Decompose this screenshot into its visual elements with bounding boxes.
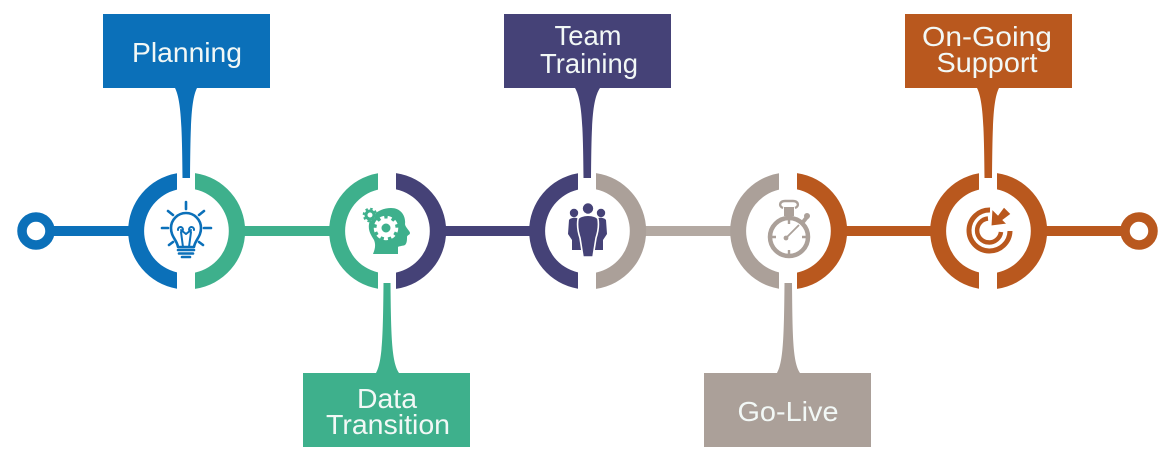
step: data transition bbox=[303, 173, 470, 447]
ring: team training bbox=[529, 173, 646, 289]
ring: data transition bbox=[329, 173, 446, 289]
callout: data transition: Transition bbox=[326, 409, 450, 440]
callout: data transition: Data bbox=[357, 383, 417, 414]
callout: on-going support: On-Going bbox=[922, 21, 1052, 52]
icon: light bulb bbox=[162, 202, 211, 257]
callout: planning: Planning bbox=[132, 37, 242, 68]
ring: planning bbox=[128, 173, 245, 289]
connector: planning to data transition bbox=[243, 226, 331, 236]
callout: team training bbox=[504, 14, 671, 178]
icon: team of people bbox=[568, 203, 607, 257]
step: on-going support bbox=[905, 14, 1072, 289]
step: planning bbox=[103, 14, 270, 289]
callout: team training: Team bbox=[554, 20, 622, 51]
callout: go-live bbox=[704, 283, 871, 447]
callout: on-going support: Support bbox=[936, 47, 1038, 78]
ring: go-live bbox=[730, 173, 847, 289]
connector: on-going support to end bbox=[1045, 226, 1125, 236]
connector: team training to go-live bbox=[644, 226, 732, 236]
end node bbox=[1125, 217, 1153, 245]
callout: team training: Training bbox=[540, 48, 638, 79]
connector: go-live to on-going support bbox=[845, 226, 933, 236]
icon: stopwatch bbox=[770, 201, 810, 256]
icon: target with arrow bbox=[969, 207, 1011, 251]
icon: head with gears bbox=[364, 208, 410, 254]
callout: data transition bbox=[303, 283, 470, 447]
connector: data transition to team training bbox=[444, 226, 532, 236]
ring: on-going support bbox=[930, 173, 1047, 289]
callout: planning bbox=[103, 14, 270, 178]
step: go-live bbox=[704, 173, 871, 447]
step: team training bbox=[504, 14, 671, 289]
callout: go-live: Go-Live bbox=[738, 396, 838, 427]
start node bbox=[22, 217, 50, 245]
connector: start to planning bbox=[53, 226, 131, 236]
callout: on-going support bbox=[905, 14, 1072, 178]
